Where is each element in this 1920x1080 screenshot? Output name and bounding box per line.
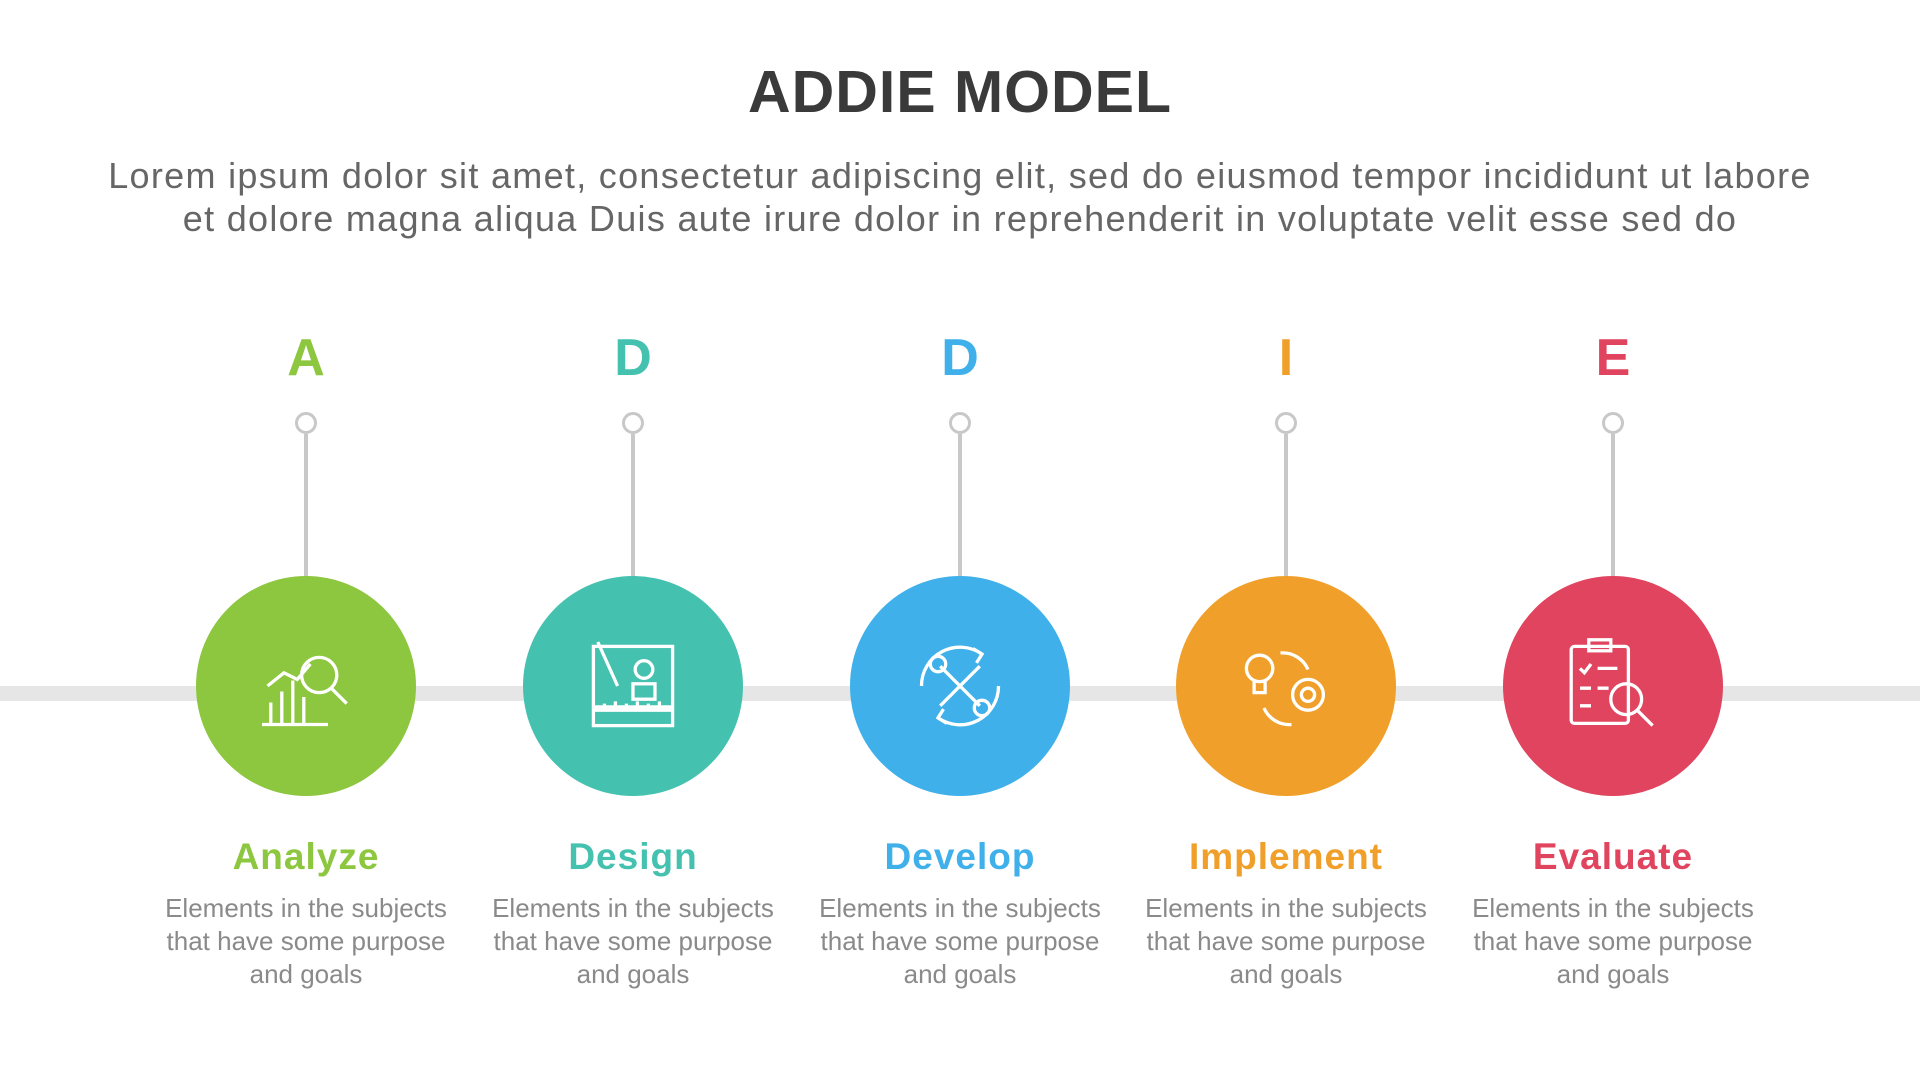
step: Analyze (165, 329, 447, 989)
description (165, 893, 447, 989)
description: and goals (1230, 959, 1342, 989)
heading: Design (568, 836, 698, 877)
heading: Develop (885, 836, 1035, 877)
description: that have some purpose (821, 926, 1099, 956)
letter I: I (1279, 329, 1293, 387)
heading: Evaluate (1533, 836, 1693, 877)
icon circle: implement (1176, 576, 1396, 796)
letter E: E (1596, 329, 1630, 387)
icon circle: develop (850, 576, 1070, 796)
icon circle: design (523, 576, 743, 796)
description: that have some purpose (1474, 926, 1752, 956)
description (1472, 893, 1754, 989)
step: Evaluate (1472, 329, 1754, 989)
description: that have some purpose (1147, 926, 1425, 956)
description: and goals (250, 959, 362, 989)
description: that have some purpose (494, 926, 772, 956)
description: Elements in the subjects (1145, 893, 1427, 923)
letter D: D (941, 329, 979, 387)
letter A: A (287, 329, 325, 387)
timeline bar (0, 686, 1920, 701)
step: Develop (819, 329, 1101, 989)
description: Elements in the subjects (819, 893, 1101, 923)
subtitle: Lorem ipsum dolor sit amet, consectetur adipiscing elit, sed do eiusmod tempor incididunt ut labore (108, 155, 1812, 196)
description (819, 893, 1101, 989)
description: and goals (904, 959, 1016, 989)
description: Elements in the subjects (165, 893, 447, 923)
subtitle: et dolore magna aliqua Duis aute irure dolor in reprehenderit in voluptate velit esse sed do (183, 198, 1737, 239)
icon circle: analyze (196, 576, 416, 796)
description: that have some purpose (167, 926, 445, 956)
subtitle (108, 155, 1812, 239)
letter D: D (614, 329, 652, 387)
step: Design (492, 329, 774, 989)
description (492, 893, 774, 989)
description (1145, 893, 1427, 989)
step: Implement (1145, 329, 1427, 989)
description: Elements in the subjects (1472, 893, 1754, 923)
heading: Analyze (233, 836, 379, 877)
description: and goals (1557, 959, 1669, 989)
heading: Implement (1189, 836, 1383, 877)
icon circle: evaluate (1503, 576, 1723, 796)
description: Elements in the subjects (492, 893, 774, 923)
title: ADDIE MODEL (748, 59, 1172, 125)
description: and goals (577, 959, 689, 989)
